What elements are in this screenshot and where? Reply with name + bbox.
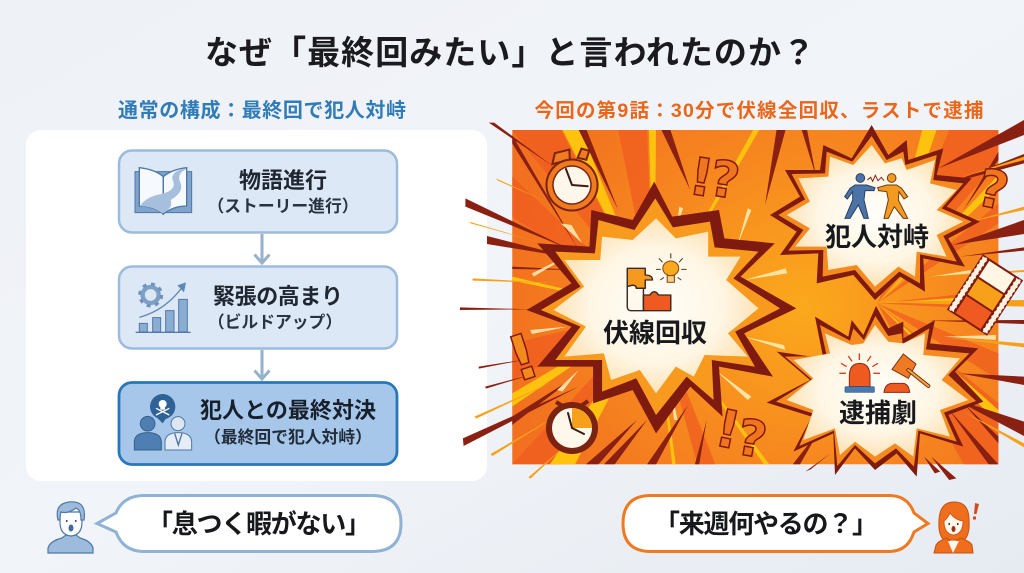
speech bubble right: 「来週何やるの？」	[654, 509, 878, 539]
burst: foreshadowing payoff	[527, 182, 796, 433]
arrow 1	[254, 234, 270, 263]
step 2: rising tension	[119, 266, 397, 348]
right subheading: 今回の第9話：30分で伏線全回収、ラストで逮捕	[534, 99, 984, 122]
icon: light bulb	[656, 253, 687, 282]
title: なぜ「最終回みたい」と言われたのか？	[205, 34, 815, 71]
icon: gavel	[884, 354, 928, 392]
label: 逮捕劇	[839, 398, 917, 428]
icon: film strip	[947, 254, 1023, 336]
step 3 label: 犯人との最終対決	[200, 398, 376, 423]
speech bubble left: 「息つく暇がない」	[147, 509, 371, 539]
outer burst lines	[460, 120, 1024, 480]
icon: stopwatch bottom	[546, 401, 598, 454]
speech bubble right	[623, 496, 928, 552]
icon: exclamation and question bottom	[710, 398, 771, 470]
icon: question right: ?	[972, 158, 1014, 223]
icon: exclamation and question bottom: !	[710, 398, 746, 462]
icon: two figures clashing	[845, 174, 908, 218]
speech bubble left	[97, 496, 401, 552]
step 1: story progress	[119, 150, 397, 232]
icon: siren	[839, 353, 880, 392]
icon: alarm clock top	[539, 145, 603, 216]
burst: confronting the culprit	[770, 125, 980, 300]
label: 犯人対峙	[825, 222, 929, 252]
icon: book with road	[135, 168, 192, 214]
step 1 label: 物語進行	[239, 168, 327, 193]
step 2 label: 緊張の高まり	[213, 284, 343, 309]
label: 伏線回収	[603, 318, 707, 348]
left subheading: 通常の構成：最終回で犯人対峙	[118, 98, 406, 122]
icon: exclamation and question top: !	[685, 147, 718, 210]
person: right viewer	[934, 502, 979, 553]
step 3: final confrontation	[119, 382, 397, 464]
step 1 sublabel: （ストーリー進行）	[207, 197, 359, 216]
step 3 sublabel: （最終回で犯人対峙）	[204, 427, 372, 447]
person: left viewer	[48, 502, 93, 553]
icon: exclamation and question bottom: ?	[732, 408, 771, 470]
icon: gear and rising chart	[136, 282, 191, 332]
background rays	[460, 120, 1024, 480]
panel: chaotic episode 9	[460, 120, 1024, 480]
burst: arrest drama	[767, 306, 983, 477]
panel: usual structure	[26, 130, 487, 481]
icon: exclamation and question top	[685, 147, 744, 211]
icon: exclamation left: !	[498, 319, 548, 397]
icon: exclamation and question top: ?	[706, 149, 744, 211]
icon: two people with skull bubble	[134, 394, 192, 450]
step 2 sublabel: （ビルドアップ）	[208, 312, 342, 332]
icon: puzzle pieces	[627, 268, 671, 311]
arrow 2	[254, 350, 270, 379]
